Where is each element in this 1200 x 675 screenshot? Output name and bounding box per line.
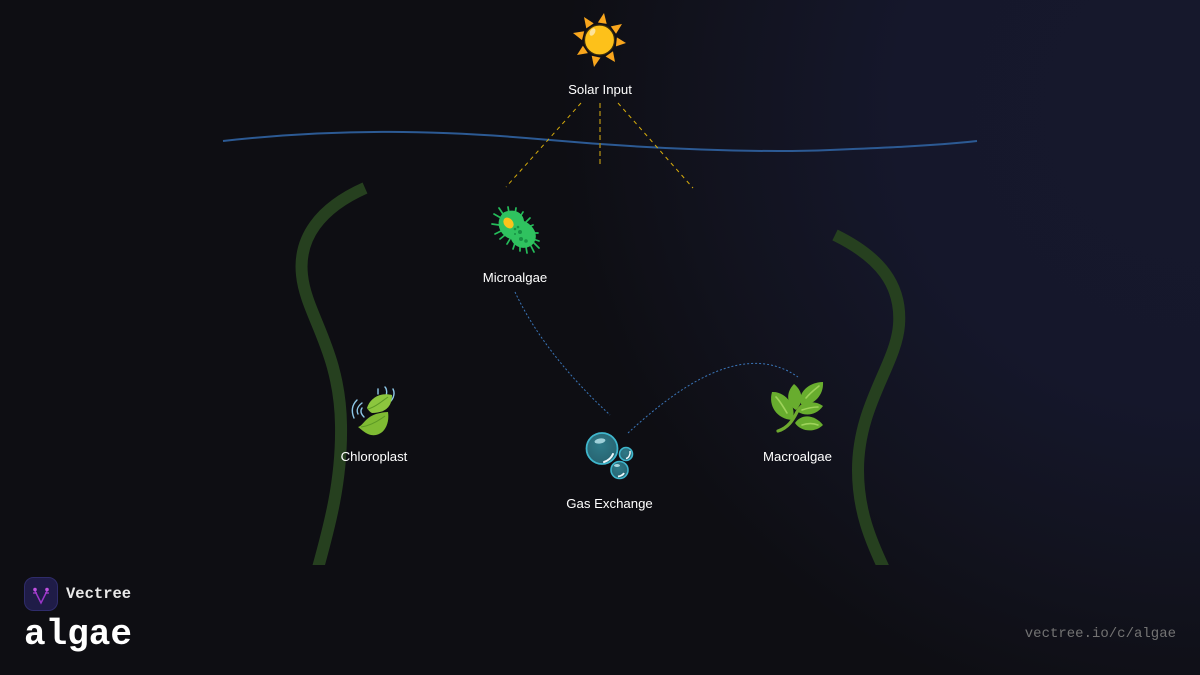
left green curve: [302, 188, 365, 575]
sun ray centre: [599, 103, 601, 165]
label: Chloroplast: Chloroplast: [341, 449, 407, 464]
label: Solar Input: Solar Input: [568, 82, 632, 97]
dotted link microalgae to gas exchange: [515, 292, 610, 415]
label: Microalgae: Microalgae: [483, 270, 547, 285]
label: Gas Exchange: Gas Exchange: [566, 496, 653, 511]
icon: Vectree logo: [24, 578, 58, 610]
icon: leaf fluttering: [352, 387, 394, 435]
icon: microbe: [492, 207, 539, 253]
sun ray right: [618, 103, 693, 188]
source url: vectree.io/c/algae: [1025, 626, 1176, 642]
icon: herb: [771, 382, 823, 431]
icon: bubbles: [586, 433, 632, 478]
brand name: Vectree: [66, 585, 131, 603]
blue water line: [223, 132, 977, 151]
icon: sun: [573, 13, 626, 67]
right green curve: [835, 235, 899, 575]
sun ray left: [506, 103, 581, 187]
title: algae: [24, 614, 132, 655]
diagram: [24, 13, 978, 611]
label: Macroalgae: Macroalgae: [763, 449, 832, 464]
dotted link gas exchange to macroalgae: [628, 363, 798, 433]
